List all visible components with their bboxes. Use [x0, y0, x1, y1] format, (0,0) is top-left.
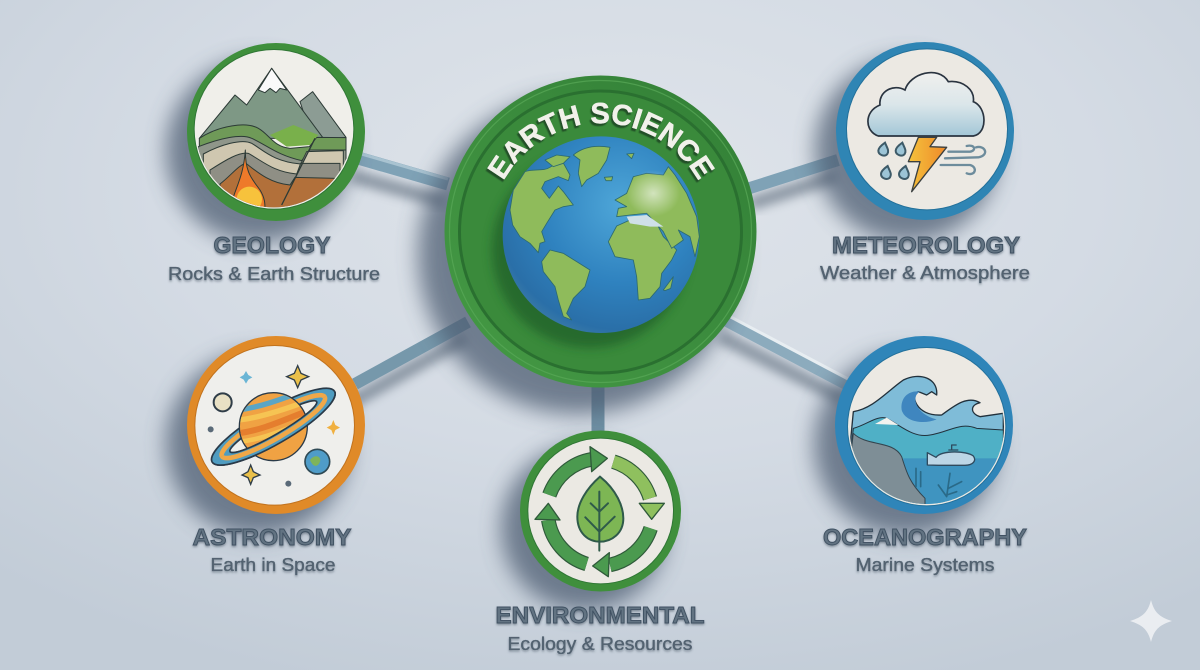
- connector: astronomy: [352, 322, 468, 402]
- node: environmental: [501, 430, 681, 611]
- node: geology: [166, 43, 365, 243]
- leaf: [577, 477, 623, 542]
- connector: environmental: [590, 385, 598, 435]
- label: environmental: ENVIRONMENTAL: [496, 602, 704, 628]
- globe shadow: [492, 152, 688, 348]
- icon: ringed planet: [194, 345, 355, 506]
- connector: oceanography: [720, 315, 850, 400]
- ring: [836, 42, 1014, 220]
- node: meteorology: [815, 42, 1014, 242]
- label: environmental: [496, 602, 704, 654]
- planet ring back: [203, 376, 343, 477]
- label: astronomy: [192, 524, 352, 575]
- planet body: [239, 393, 307, 461]
- ring: [187, 43, 365, 221]
- icon: sparkle: [1130, 600, 1172, 642]
- ring: [520, 430, 681, 592]
- planet ring front: [212, 391, 336, 466]
- label: oceanography: OCEANOGRAPHY: [823, 524, 1027, 550]
- label: meteorology: Weather & Atmosphere: [820, 262, 1030, 283]
- label: astronomy: ASTRONOMY: [192, 524, 352, 550]
- node: oceanography: [814, 336, 1013, 536]
- connector: geology: [352, 153, 448, 202]
- label: geology: GEOLOGY: [214, 232, 330, 258]
- label: astronomy: Earth in Space: [210, 554, 336, 575]
- label: geology: Rocks & Earth Structure: [168, 263, 380, 284]
- node: astronomy: [166, 336, 365, 536]
- icon: storm cloud: [846, 48, 1008, 210]
- moons and stars: [214, 393, 232, 411]
- label: meteorology: METEOROLOGY: [832, 232, 1020, 258]
- label: oceanography: [823, 524, 1027, 575]
- ring: [835, 336, 1013, 514]
- hub: earth science: [403, 76, 756, 428]
- hub disc: [444, 76, 756, 388]
- icon: ocean wave and submarine: [843, 347, 1007, 517]
- globe: [503, 136, 699, 333]
- title: earth science: EARTH SCIENCE: [486, 102, 715, 183]
- label: oceanography: Marine Systems: [856, 554, 994, 575]
- icon: recycle leaf: [527, 438, 674, 584]
- ring: [187, 336, 365, 514]
- connector: meteorology: [750, 160, 838, 204]
- label: environmental: Ecology & Resources: [508, 633, 692, 654]
- icon: mountain strata: [194, 49, 354, 210]
- label: geology: [168, 232, 380, 284]
- label: meteorology: [820, 232, 1030, 283]
